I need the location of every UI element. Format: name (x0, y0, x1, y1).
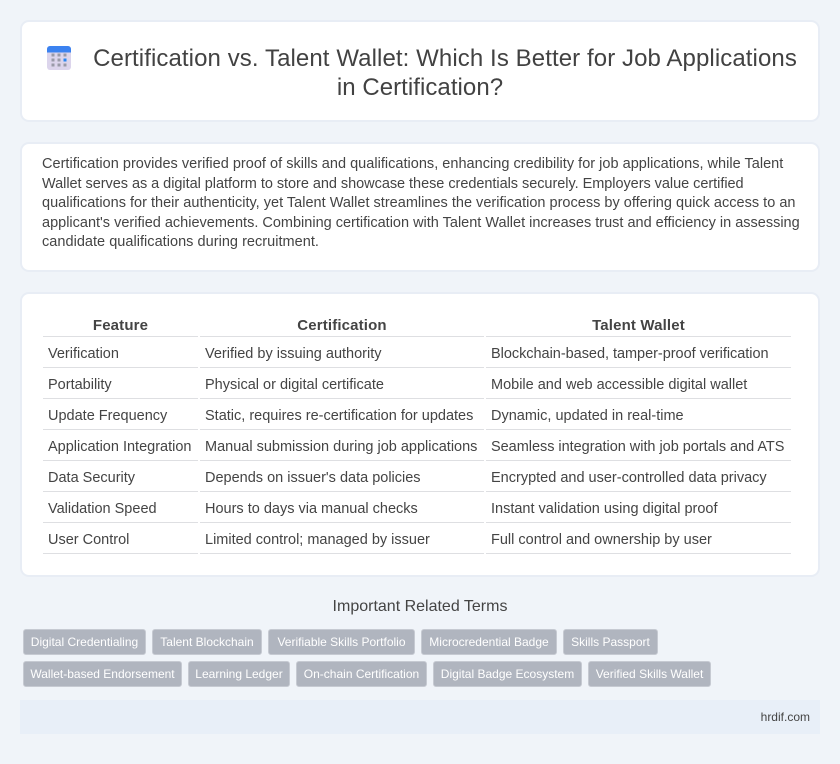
text block: intro: candidate qualifications during recruitment. (42, 234, 319, 250)
text block: intro: applicant's verified achievements. Combining certification with Talent Wallet increases trust and efficiency in assessing (42, 215, 800, 231)
table header: Certification (297, 317, 387, 334)
tag: Skills Passport (571, 635, 650, 649)
row: Portability (43, 377, 791, 399)
tag (433, 661, 582, 687)
row: Verification (43, 346, 791, 368)
tag (268, 629, 415, 655)
row: Validation Speed (43, 501, 791, 523)
tag (23, 661, 182, 687)
row: Data Security (43, 470, 791, 492)
text block: intro: Wallet serves as a digital platform to store and showcase these credentials securely. Employers value certified (42, 176, 744, 192)
title (93, 45, 797, 101)
table header (43, 317, 791, 337)
tag: Verifiable Skills Portfolio (277, 635, 406, 649)
row: Data Security: Encrypted and user-controlled data privacy (491, 470, 767, 486)
tag (23, 629, 146, 655)
row: Application Integration: Seamless integration with job portals and ATS (491, 439, 784, 455)
row: Application Integration: Manual submission during job applications (205, 439, 477, 455)
row: Data Security: Data Security (48, 470, 135, 486)
tag (588, 661, 711, 687)
tag: Talent Blockchain (160, 635, 254, 649)
panel: intro text (20, 142, 820, 272)
tag: Verified Skills Wallet (596, 667, 703, 681)
title: Certification vs. Talent Wallet: Which Is Better for Job Applications (93, 45, 797, 72)
row: Validation Speed: Validation Speed (48, 501, 157, 517)
row: User Control: Full control and ownership by user (491, 532, 712, 548)
row: Verification: Verified by issuing authority (205, 346, 382, 362)
row: User Control: User Control (48, 532, 129, 548)
row: Data Security: Depends on issuer's data policies (205, 470, 421, 486)
tag (188, 661, 290, 687)
panel: title card (20, 20, 820, 122)
icon: calendar (47, 46, 71, 70)
tags: related terms (23, 629, 711, 687)
tag (563, 629, 658, 655)
tag: Learning Ledger (195, 667, 283, 681)
text block: intro: qualifications for their authenticity, yet Talent Wallet streamlines the verification process by offering quick access to an (42, 195, 795, 211)
row: Update Frequency: Update Frequency (48, 408, 167, 424)
footer (20, 700, 820, 734)
row: Verification: Blockchain-based, tamper-proof verification (491, 346, 769, 362)
row: Portability: Mobile and web accessible digital wallet (491, 377, 747, 393)
row: User Control: Limited control; managed by issuer (205, 532, 430, 548)
title: in Certification? (337, 74, 503, 101)
tag: Wallet-based Endorsement (30, 667, 175, 681)
row: Portability: Physical or digital certificate (205, 377, 384, 393)
heading: related terms: Important Related Terms (333, 598, 507, 615)
tag: Digital Credentialing (31, 635, 138, 649)
tag (296, 661, 427, 687)
panel: comparison table (20, 292, 820, 577)
tag (152, 629, 262, 655)
tag: Microcredential Badge (429, 635, 549, 649)
table header: Feature (93, 317, 148, 334)
row: Application Integration: Application Integration (48, 439, 192, 455)
tag (421, 629, 557, 655)
footer text: hrdif.com (761, 710, 810, 724)
text block: intro: Certification provides verified proof of skills and qualifications, enhancing credibility for job applications, while Talent (42, 156, 783, 172)
row: Update Frequency: Static, requires re-certification for updates (205, 408, 473, 424)
tag: On-chain Certification (304, 667, 419, 681)
row: Verification: Verification (48, 346, 119, 362)
row: Update Frequency: Dynamic, updated in real-time (491, 408, 684, 424)
row: Update Frequency (43, 408, 791, 430)
table header: Talent Wallet (592, 317, 685, 334)
row: Application Integration (43, 439, 791, 461)
row: Validation Speed: Instant validation using digital proof (491, 501, 718, 517)
row: Portability: Portability (48, 377, 112, 393)
row: Validation Speed: Hours to days via manual checks (205, 501, 418, 517)
tag: Digital Badge Ecosystem (441, 667, 574, 681)
row: User Control (43, 532, 791, 554)
text block: intro (42, 156, 800, 250)
